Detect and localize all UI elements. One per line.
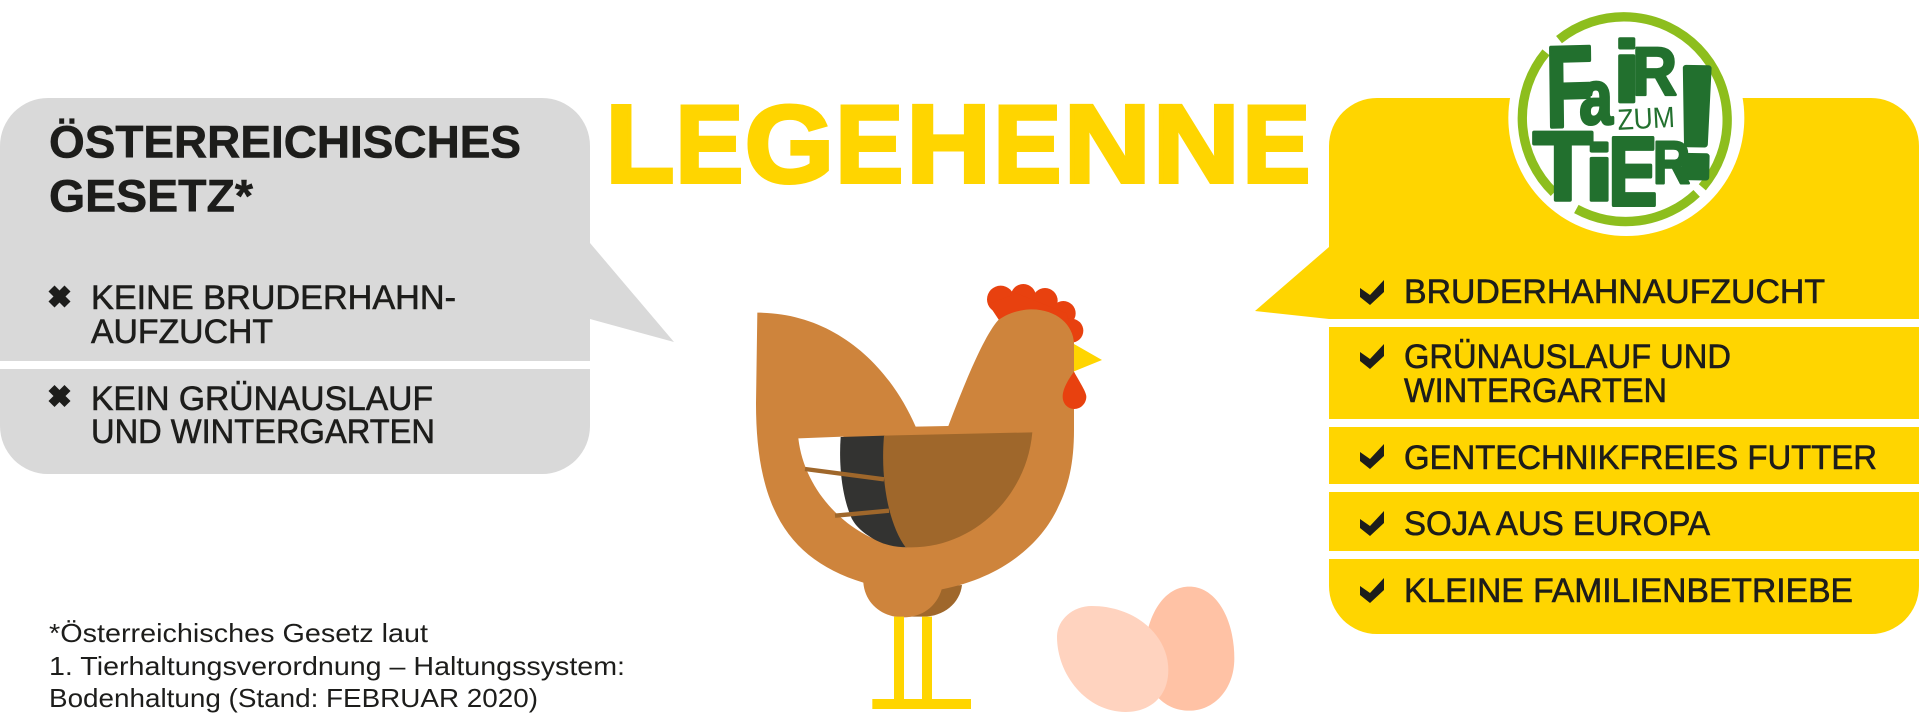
title: H xyxy=(906,83,991,206)
egg front xyxy=(1057,606,1168,712)
item: kein Grünauslauf und Wintergarten: UND WINTERGARTEN xyxy=(91,413,435,451)
item: keine Bruderhahnaufzucht: AUFZUCHT xyxy=(91,313,273,351)
title: G xyxy=(745,82,834,206)
item: keine Bruderhahnaufzucht xyxy=(91,279,456,351)
hen feather strokes xyxy=(805,469,889,516)
logo wordmark: E xyxy=(1608,118,1657,226)
grey lower section xyxy=(0,369,590,474)
hen wing xyxy=(883,432,1032,547)
logo green ring xyxy=(1522,17,1727,222)
heading: österreichisches Gesetz xyxy=(49,116,521,222)
icon: cross 1 xyxy=(52,288,68,304)
item: Grünauslauf und Wintergarten: WINTERGARTEN xyxy=(1404,372,1667,410)
hen rear thigh xyxy=(907,585,962,617)
row background 4 xyxy=(1329,492,1919,551)
logo: Fair zum Tier xyxy=(1508,0,1744,236)
logo wordmark: ! xyxy=(1669,34,1724,212)
logo wordmark: ZUM xyxy=(1617,101,1676,137)
logo wordmark: a xyxy=(1579,55,1613,141)
item: kein Grünauslauf und Wintergarten: KEIN GRÜNAUSLAUF xyxy=(91,380,433,418)
panel: Fair zum Tier xyxy=(1255,98,1919,634)
row background 5 xyxy=(1329,559,1919,634)
heading: österreichisches Gesetz: GESETZ* xyxy=(49,170,253,222)
logo wordmark: R xyxy=(1632,34,1677,109)
title xyxy=(606,82,1310,206)
item: kleine Familienbetriebe: KLEINE FAMILIENBETRIEBE xyxy=(1404,572,1853,610)
item: Bruderhahnaufzucht: BRUDERHAHNAUFZUCHT xyxy=(1404,273,1825,311)
title: N xyxy=(1064,84,1151,206)
title: E xyxy=(1243,83,1310,206)
item: Grünauslauf und Wintergarten xyxy=(1404,338,1731,410)
title: L xyxy=(606,82,674,206)
egg back xyxy=(1144,587,1234,711)
title: E xyxy=(676,83,743,206)
icon: cross 2 xyxy=(52,388,68,404)
logo wordmark: i xyxy=(1613,24,1640,121)
logo wordmark: T xyxy=(1533,112,1593,221)
icon: check 3 xyxy=(1360,444,1384,469)
icon: check 5 xyxy=(1360,578,1384,603)
row background 3 xyxy=(1329,427,1919,484)
footnote: *Österreichisches Gesetz laut xyxy=(49,618,429,648)
row background 2 xyxy=(1329,327,1919,419)
speech bubble: grey upper section xyxy=(0,98,674,361)
speech bubble: yellow top row xyxy=(1255,98,1919,319)
footnote: 1. Tierhaltungsverordnung – Haltungssystem: xyxy=(49,651,625,681)
illustration: hen xyxy=(756,284,1234,712)
footnote xyxy=(49,618,625,713)
logo wordmark: R xyxy=(1653,129,1690,196)
item: kein Grünauslauf und Wintergarten xyxy=(91,380,435,451)
hen beak xyxy=(1074,344,1102,371)
hen wattle xyxy=(1063,372,1086,409)
title: N xyxy=(1153,84,1240,206)
panel: österreichisches Gesetz xyxy=(0,98,674,474)
logo white disc xyxy=(1508,0,1744,236)
icon: check 2 xyxy=(1360,344,1384,369)
logo wordmark: i xyxy=(1584,128,1614,217)
item: Grünauslauf und Wintergarten: GRÜNAUSLAUF UND xyxy=(1404,338,1731,376)
item: keine Bruderhahnaufzucht: KEINE BRUDERHAHN- xyxy=(91,279,456,317)
title: E xyxy=(836,83,903,206)
hen body xyxy=(756,309,1074,617)
icon: check 4 xyxy=(1360,511,1384,536)
logo wordmark: F xyxy=(1545,22,1593,151)
footnote: Bodenhaltung (Stand: FEBRUAR 2020) xyxy=(49,683,538,713)
heading: österreichisches Gesetz: ÖSTERREICHISCHES xyxy=(49,116,521,168)
hen dark feathers xyxy=(840,436,907,547)
item: Soja aus Europa: SOJA AUS EUROPA xyxy=(1404,505,1710,543)
hen comb xyxy=(987,284,1083,343)
title: E xyxy=(994,83,1061,206)
hen wing opening xyxy=(798,437,907,547)
item: gentechnikfreies Futter: GENTECHNIKFREIES FUTTER xyxy=(1404,439,1877,477)
hen legs xyxy=(872,617,971,709)
icon: check 1 xyxy=(1360,280,1384,305)
logo wordmark xyxy=(1533,22,1724,226)
